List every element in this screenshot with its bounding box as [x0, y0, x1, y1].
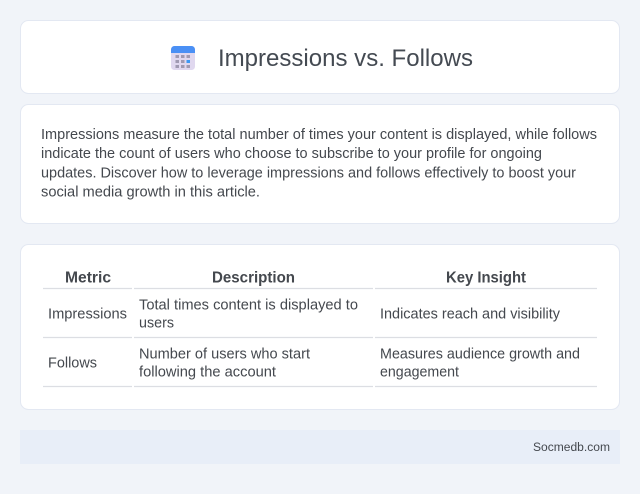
- intro paragraph: social media growth in this article.: [41, 184, 260, 200]
- title: Impressions vs. Follows: [218, 45, 473, 72]
- table row: Impressions: users: [139, 316, 174, 332]
- footer source label: Socmedb.com: [533, 440, 610, 454]
- panel: comparison table card: [20, 244, 620, 410]
- table column headers: Metric: [65, 270, 111, 286]
- table row: Impressions: Total times content is displayed to: [139, 298, 358, 314]
- table row: Follows: Measures audience growth and: [380, 346, 580, 362]
- table row: Follows: [48, 346, 580, 380]
- table column headers: [65, 270, 527, 286]
- icon: calendar: [171, 46, 195, 70]
- table row: Impressions: Indicates reach and visibility: [380, 306, 561, 322]
- intro paragraph: updates. Discover how to leverage impressions and follows effectively to boost your: [41, 166, 576, 182]
- table row: Follows: engagement: [380, 364, 459, 380]
- table row: Impressions: Impressions: [48, 306, 127, 322]
- table column headers: Key Insight: [446, 270, 527, 286]
- table column headers: Description: [212, 270, 295, 286]
- table row: Impressions: [48, 298, 561, 332]
- table row: Follows: following the account: [139, 364, 276, 380]
- table row: Follows: Follows: [48, 356, 97, 372]
- panel: intro text card: [20, 104, 620, 224]
- table row: Follows: Number of users who start: [139, 346, 310, 362]
- panel: title card: [20, 20, 620, 94]
- intro paragraph: [41, 127, 597, 200]
- footer bar: [20, 430, 620, 464]
- intro paragraph: Impressions measure the total number of times your content is displayed, while follows: [41, 127, 597, 143]
- intro paragraph: indicate the count of users who choose to subscribe to your profile for ongoing: [41, 146, 542, 162]
